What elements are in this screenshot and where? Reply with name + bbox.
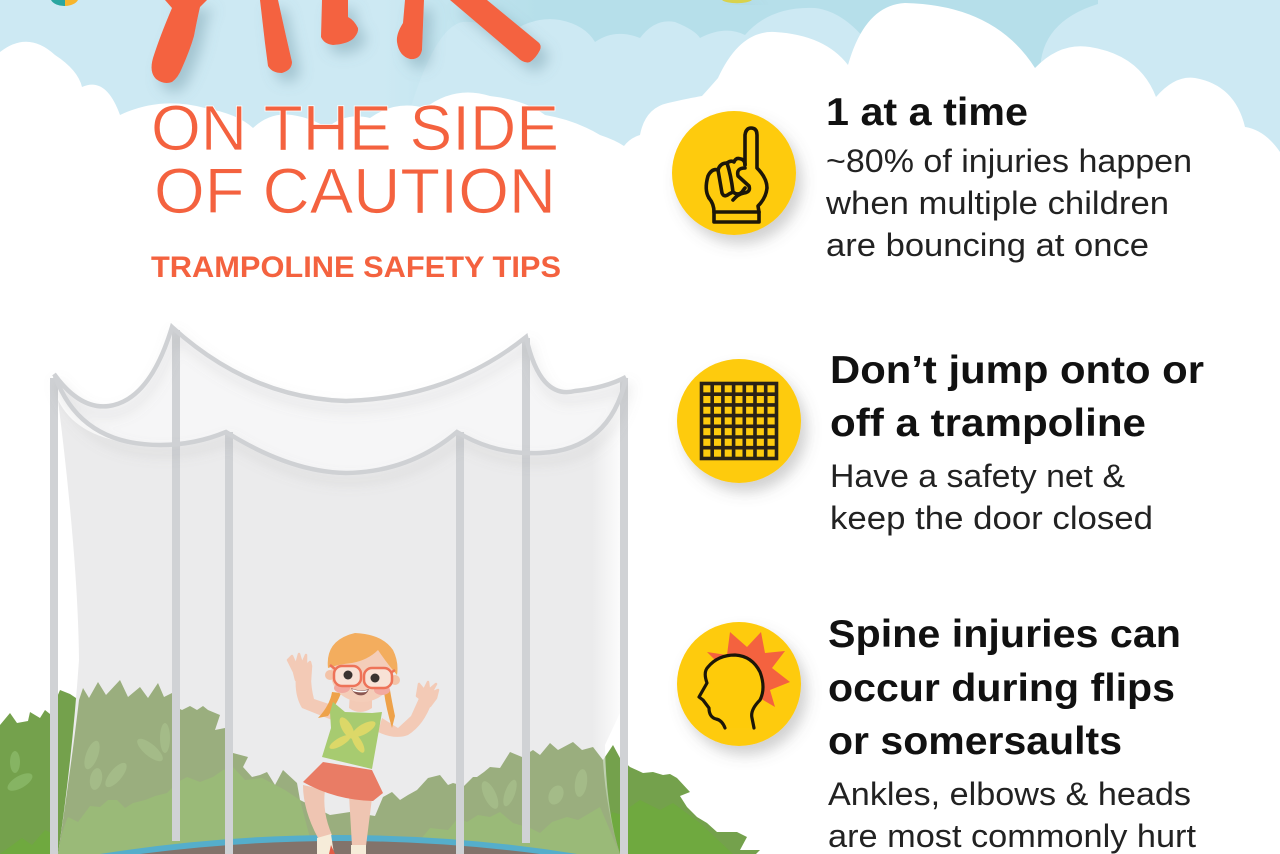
skirt bbox=[303, 762, 383, 801]
trampoline mat bbox=[100, 835, 577, 854]
top-left partial ball bbox=[51, 0, 78, 6]
tip 2 text: keep the door closed bbox=[830, 500, 1153, 536]
glasses bbox=[334, 666, 392, 688]
tip 2 text: Have a safety net & bbox=[830, 458, 1125, 494]
tip 3 icon: head with impact burst bbox=[677, 622, 801, 746]
socks and shoes bbox=[317, 834, 366, 854]
heading: OF CAUTION bbox=[154, 155, 556, 227]
neck and face bbox=[349, 692, 372, 712]
pigtails bbox=[318, 690, 395, 728]
sky background bbox=[0, 0, 1280, 230]
front bushes bbox=[0, 800, 733, 854]
tip 1 text: when multiple children bbox=[825, 185, 1169, 221]
tip 3 text: are most commonly hurt bbox=[828, 818, 1196, 854]
tip 3 text bbox=[828, 613, 1196, 854]
heading: TRAMPOLINE SAFETY TIPS bbox=[151, 251, 561, 284]
net poles bbox=[50, 330, 628, 854]
net curtain bbox=[54, 327, 626, 854]
tip 2 text bbox=[830, 349, 1204, 536]
tip 1 icon: one finger raised bbox=[672, 111, 796, 235]
tip 2 text: Don’t jump onto or bbox=[830, 349, 1204, 392]
butterfly print bbox=[328, 715, 378, 755]
tip 3 text: occur during flips bbox=[828, 667, 1175, 710]
hair bbox=[328, 633, 398, 675]
heading bbox=[151, 92, 561, 284]
tip 2 text: off a trampoline bbox=[830, 402, 1146, 445]
tip 3 text: Ankles, elbows & heads bbox=[828, 776, 1191, 812]
tip 3 text: or somersaults bbox=[828, 720, 1122, 763]
muted bushes seen through the net bbox=[58, 680, 620, 854]
mouth bbox=[351, 688, 369, 695]
rear bushes bbox=[0, 690, 760, 854]
arms and hands bbox=[296, 675, 432, 737]
heading: ON THE SIDE bbox=[151, 92, 559, 164]
tip 2 icon: net grid bbox=[677, 359, 801, 483]
tip 3 text: Spine injuries can bbox=[828, 613, 1181, 656]
hand-lettered title fragment bbox=[152, 0, 541, 83]
tip 1 text: 1 at a time bbox=[826, 91, 1028, 134]
net top hems bbox=[54, 327, 626, 473]
tip 1 text: are bouncing at once bbox=[826, 227, 1149, 263]
shirt bbox=[322, 702, 382, 769]
tip 1 text: ~80% of injuries happen bbox=[826, 143, 1192, 179]
top-centre partial ball bbox=[722, 0, 752, 3]
girl bbox=[288, 633, 438, 854]
tip 1 text bbox=[825, 91, 1192, 263]
bush leaves bbox=[5, 723, 589, 811]
legs bbox=[303, 785, 372, 846]
